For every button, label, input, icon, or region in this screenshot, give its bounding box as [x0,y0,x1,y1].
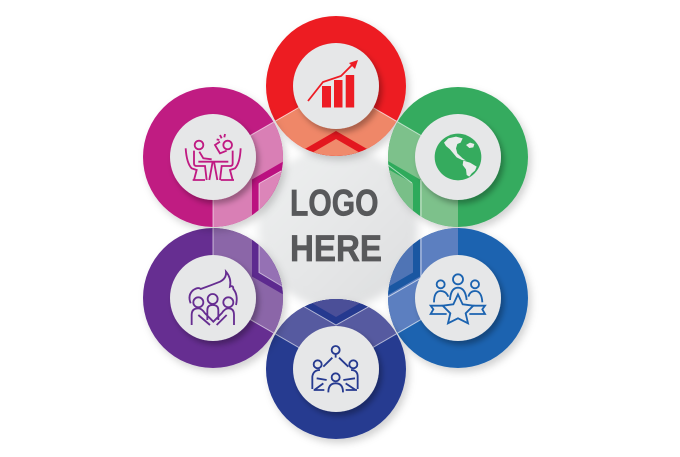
segment: green globe [388,87,534,232]
segment: blue team star [388,228,534,376]
segment: magenta discussion [142,87,290,234]
logo placeholder text: HERE [290,227,382,269]
icon: globe [435,134,481,180]
icon: team with flame [189,272,237,325]
segment: red growth [266,16,412,163]
icon: two people at table [186,134,241,180]
icon: rising bar chart [308,60,358,108]
icon: team with star [431,274,485,323]
segment: navy collaboration [266,299,412,446]
icon: team raising idea bulb [312,346,358,392]
logo placeholder text [290,182,382,269]
central glass hexagon [258,142,418,314]
logo placeholder text: LOGO [290,182,378,224]
segment: purple team spirit [142,228,290,376]
